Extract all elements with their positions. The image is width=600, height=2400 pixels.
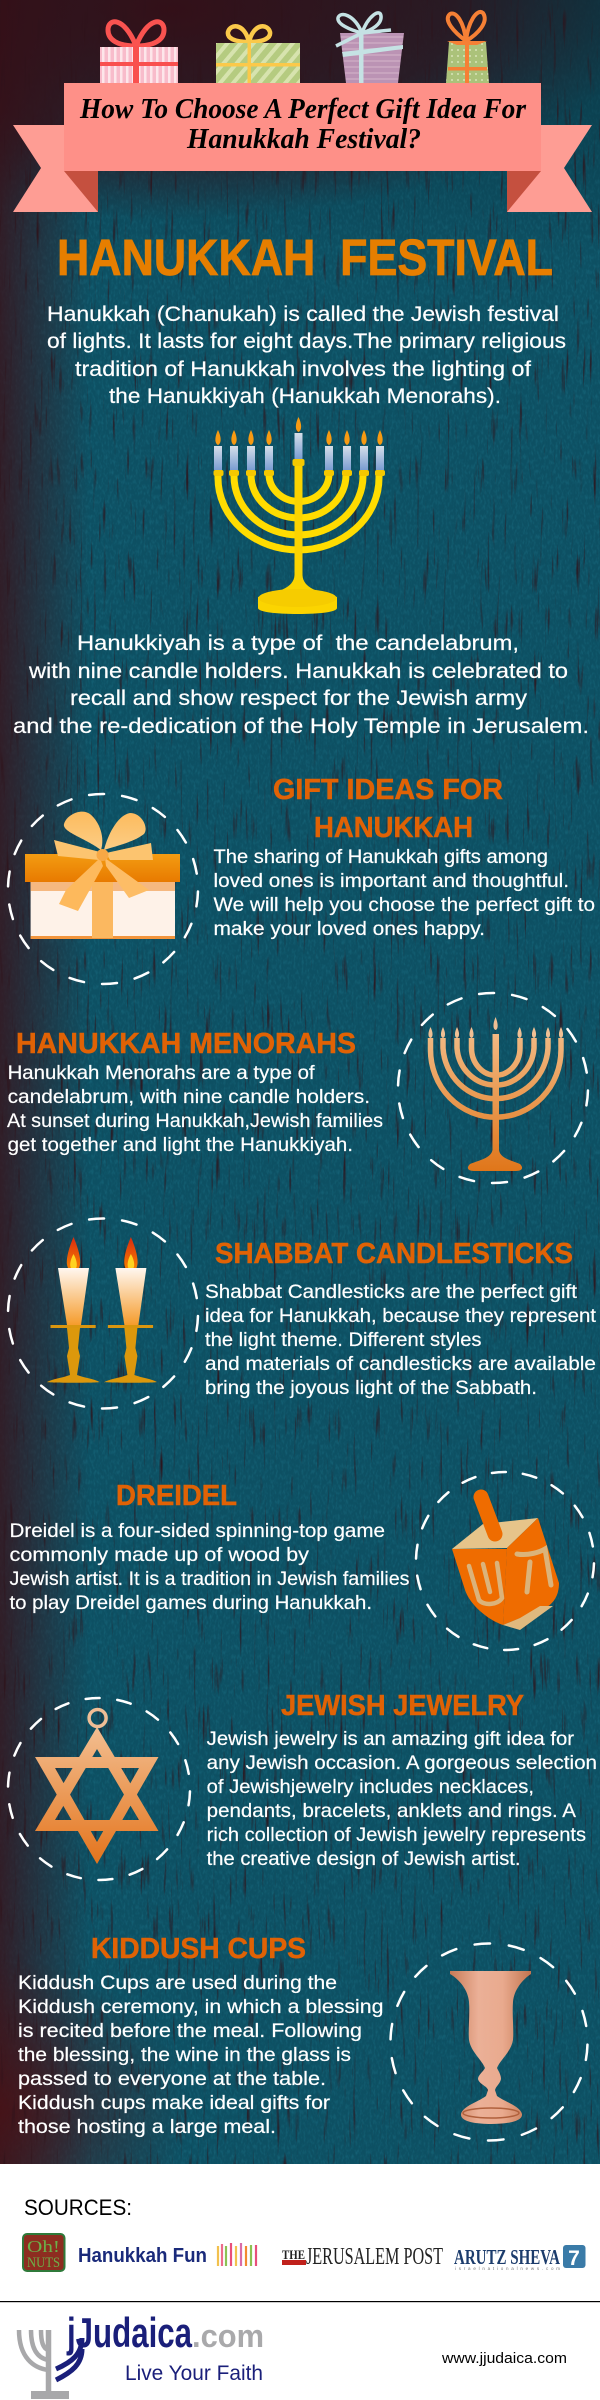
body text: of Jewishjewelry includes necklaces, (207, 1776, 534, 1798)
heading: HANUKKAH MENORAHS (16, 1028, 356, 1060)
body text (10, 1520, 410, 1614)
logo: The Jerusalem Post: THE (282, 2247, 305, 2262)
heading: KIDDUSH CUPS (91, 1933, 306, 1965)
ribbon left tail (13, 125, 98, 212)
website url: www.jjudaica.com (441, 2350, 567, 2367)
ribbon right tail (507, 125, 592, 212)
body text (205, 1281, 597, 1399)
body text: commonly made up of wood by (10, 1544, 309, 1566)
body text: those hosting a large meal. (18, 2116, 276, 2138)
body text: and materials of candlesticks are available (205, 1353, 596, 1375)
ribbon left fold (64, 171, 98, 212)
heading: sources: SOURCES: (24, 2195, 132, 2220)
body text: the light theme. Different styles (205, 1329, 482, 1351)
logo: Hanukkah Fun: Hanukkah Fun (78, 2245, 207, 2267)
logo: The Jerusalem Post (282, 2244, 443, 2270)
body text: We will help you choose the perfect gift to (214, 894, 595, 916)
ribbon right fold (507, 171, 541, 212)
text block: Hanukkiyah description (13, 632, 589, 738)
logo: Oh Nuts: Oh! (27, 2237, 60, 2256)
icon: dreidel in dashed circle (414, 1470, 596, 1652)
icon: golden menorah (214, 417, 385, 614)
icon: grey menorah (19, 2330, 69, 2395)
ribbon main band (64, 83, 541, 171)
body text: Jewish jewelry is an amazing gift idea for (207, 1728, 575, 1750)
body text: the creative design of Jewish artist. (207, 1848, 520, 1870)
logo: Oh Nuts: NUTS (27, 2255, 60, 2271)
logo: Arutz Sheva: ARUTZ SHEVA (454, 2245, 561, 2269)
panel: Hanukkah menorahs (7, 991, 590, 1185)
footer logo: jJudaica (19, 2309, 264, 2395)
icon: orange gift box in dashed circle (6, 792, 200, 986)
body text: to play Dreidel games during Hanukkah. (10, 1592, 372, 1614)
body text: Kiddush cups make ideal gifts for (18, 2092, 331, 2114)
logo: The Jerusalem Post: JERUSALEM POST (306, 2244, 443, 2270)
panel: Shabbat candlesticks (6, 1216, 597, 1411)
body text: At sunset during Hanukkah,Jewish families (7, 1110, 383, 1132)
body text: loved ones is important and thoughtful. (214, 870, 569, 892)
heading: HANUKKAH (314, 812, 473, 844)
tagline: Live Your Faith (125, 2362, 263, 2385)
body text (214, 846, 595, 940)
panel: sources (23, 2195, 586, 2271)
title: How To Choose A Perfect Gift Idea For (79, 94, 527, 125)
banner ribbon (13, 83, 592, 212)
body text (207, 1728, 597, 1870)
wordmark suffix: .com (192, 2318, 264, 2354)
icon: navy arcs (56, 2338, 82, 2380)
title (79, 94, 527, 155)
icon: copper cup in dashed circle (388, 1941, 590, 2143)
panel: Jewish jewelry (6, 1690, 597, 1882)
text block: intro: the Hanukkiyah (Hanukkah Menorahs). (109, 385, 501, 408)
text block: Hanukkiyah description: with nine candle holders. Hanukkah is celebrated to (28, 660, 568, 683)
title: Hanukkah Festival? (186, 124, 421, 155)
text block: intro: tradition of Hanukkah involves the lighting of (75, 358, 531, 381)
panel: dreidel (10, 1470, 596, 1652)
logo: Arutz Sheva: 7 (568, 2247, 580, 2270)
heading: JEWISH JEWELRY (281, 1690, 524, 1722)
body text: candelabrum, with nine candle holders. (8, 1086, 370, 1108)
body text: Kiddush Cups are used during the (18, 1972, 337, 1994)
panel: gift ideas (6, 774, 595, 986)
text block: intro: Hanukkah (Chanukah) is called the Jewish festival (47, 303, 559, 326)
body text: Shabbat Candlesticks are the perfect gift (205, 1281, 578, 1303)
illustration: row of gift boxes (100, 12, 489, 83)
body text: get together and light the Hanukkiyah. (8, 1134, 353, 1156)
icon: green gift (216, 26, 300, 83)
body text: idea for Hanukkah, because they represent (205, 1305, 597, 1327)
body text: pendants, bracelets, anklets and rings. A (207, 1800, 576, 1822)
heading: DREIDEL (116, 1480, 237, 1512)
body text: Hanukkah Menorahs are a type of (8, 1062, 315, 1084)
body text: any Jewish occasion. A gorgeous selection (207, 1752, 597, 1774)
icon: green dotted gift (446, 12, 489, 83)
body text: rich collection of Jewish jewelry represents (207, 1824, 586, 1846)
body text (7, 1062, 383, 1156)
text block: Hanukkiyah description: and the re-dedication of the Holy Temple in Jerusalem. (13, 715, 589, 738)
body text: Kiddush ceremony, in which a blessing (18, 1996, 384, 2018)
icon: two candlesticks in dashed circle (6, 1216, 200, 1411)
logo: Arutz Sheva: israelnationalnews.com (455, 2266, 560, 2271)
icon: orange menorah in dashed circle (396, 991, 590, 1185)
logo: Oh Nuts (23, 2234, 64, 2271)
heading (273, 774, 503, 844)
body text: passed to everyone at the table. (18, 2068, 326, 2090)
wordmark: jJudaica (66, 2309, 192, 2356)
icon: purple gift (336, 13, 404, 83)
icon: pink gift (100, 22, 178, 83)
text block: intro: of lights. It lasts for eight days.The primary religious (47, 330, 566, 353)
text block: Hanukkiyah description: recall and show respect for the Jewish army (70, 687, 528, 710)
body text: The sharing of Hanukkah gifts among (214, 846, 548, 868)
body text: bring the joyous light of the Sabbath. (205, 1377, 537, 1399)
body text: make your loved ones happy. (214, 918, 485, 940)
text block: intro (47, 303, 566, 408)
text block: Hanukkiyah description: Hanukkiyah is a type of the candelabrum, (77, 632, 519, 655)
body text: Jewish artist. It is a tradition in Jewish families (10, 1568, 410, 1590)
body text: is recited before the meal. Following (18, 2020, 362, 2042)
body text: Dreidel is a four-sided spinning-top game (10, 1520, 385, 1542)
body text (18, 1972, 384, 2138)
heading: SHABBAT CANDLESTICKS (215, 1238, 573, 1270)
panel: Kiddush cups (18, 1933, 590, 2143)
icon: star of David pendant in dashed circle (6, 1696, 192, 1882)
heading: GIFT IDEAS FOR (273, 774, 503, 806)
body text: the blessing, the wine in the glass is (18, 2044, 351, 2066)
